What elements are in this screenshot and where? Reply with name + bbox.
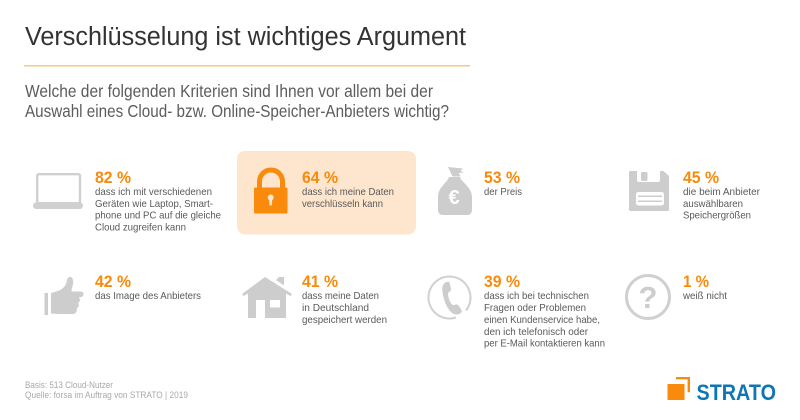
value and description	[95, 168, 221, 234]
value and description: per E-Mail kontaktieren kann	[484, 338, 605, 350]
value and description	[484, 168, 522, 198]
item: 64 percent	[254, 168, 394, 214]
value and description: 82 %	[95, 168, 131, 187]
subtitle question: Auswahl eines Cloud- bzw. Online-Speicher-Anbieters wichtig?	[25, 101, 449, 121]
icon: thumbs up	[44, 277, 84, 315]
item: 82 percent	[33, 168, 221, 234]
source note: Basis: 513 Cloud-Nutzer	[25, 380, 113, 390]
value and description: 64 %	[302, 168, 338, 187]
panel: highlighted item background	[237, 151, 416, 234]
item: 53 percent	[438, 167, 522, 215]
title: Verschlüsselung ist wichtiges Argument	[25, 23, 466, 51]
icon: telephone in circle	[428, 277, 470, 319]
item: 42 percent	[44, 272, 201, 315]
value and description: Geräten wie Laptop, Smart-	[95, 199, 213, 210]
value and description: dass ich bei technischen	[484, 291, 589, 302]
value and description: verschlüsseln kann	[302, 199, 383, 210]
value and description: auswählbaren	[683, 199, 743, 210]
subtitle question: Welche der folgenden Kriterien sind Ihnen vor allem bei der	[25, 81, 433, 101]
icon: question mark in circle: ?	[639, 280, 657, 315]
value and description: dass ich mit verschiedenen	[95, 187, 212, 198]
value and description: Cloud zugreifen kann	[95, 222, 186, 234]
value and description: 1 %	[683, 272, 709, 291]
icon: floppy disk	[629, 171, 669, 211]
value and description: 45 %	[683, 168, 719, 187]
value and description: das Image des Anbieters	[95, 291, 201, 302]
value and description: phone und PC auf die gleiche	[95, 210, 221, 222]
source note: Quelle: forsa im Auftrag von STRATO | 2019	[25, 390, 188, 400]
value and description: 39 %	[484, 272, 520, 291]
item: 41 percent	[242, 272, 387, 326]
icon: padlock	[254, 170, 288, 214]
value and description: in Deutschland	[302, 303, 369, 314]
value and description: den ich telefonisch oder	[484, 327, 589, 338]
icon: house	[242, 277, 292, 318]
value and description	[302, 168, 394, 210]
value and description	[682, 272, 727, 302]
value and description: der Preis	[484, 187, 522, 198]
value and description	[302, 272, 387, 326]
value and description	[484, 272, 605, 350]
value and description: dass meine Daten	[302, 291, 379, 302]
value and description: Speichergrößen	[683, 210, 751, 222]
item: 39 percent	[428, 272, 605, 350]
value and description: 42 %	[95, 272, 131, 291]
icon: laptop	[33, 174, 83, 209]
source note	[25, 380, 188, 400]
item: 45 percent	[629, 168, 761, 222]
logo: STRATO	[668, 378, 776, 405]
value and description: 41 %	[302, 272, 338, 291]
value and description: die beim Anbieter	[683, 187, 761, 198]
value and description: 53 %	[484, 168, 520, 187]
logo: STRATO: STRATO	[696, 380, 776, 405]
item: 1 percent	[626, 272, 727, 318]
value and description: weiß nicht	[682, 291, 727, 302]
value and description: gespeichert werden	[302, 315, 387, 326]
value and description: einen Kundenservice habe,	[484, 315, 600, 326]
value and description: dass ich meine Daten	[302, 187, 394, 198]
icon: euro money bag: €	[448, 187, 460, 209]
value and description	[95, 272, 201, 302]
value and description	[683, 168, 761, 222]
subtitle question	[25, 81, 449, 121]
value and description: Fragen oder Problemen	[484, 303, 586, 314]
